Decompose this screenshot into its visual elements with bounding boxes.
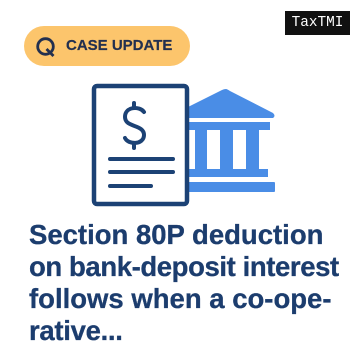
title: on bank-deposit interest: [29, 251, 339, 282]
dollar sign: [125, 103, 144, 148]
icon: document: [94, 86, 187, 204]
badge label: CASE UPDATE: [66, 36, 172, 54]
logo: TaxTMI: TaxTMI: [292, 15, 343, 31]
icon: bank: [180, 89, 275, 192]
title: follows when a co-ope-: [29, 283, 332, 314]
title: rative...: [29, 315, 123, 346]
title: Section 80P deduction: [29, 219, 323, 250]
text lines: [110, 159, 173, 186]
badge: case update: [24, 26, 190, 66]
logo: TaxTMI: [285, 11, 350, 35]
icon: Q search mark: [36, 37, 55, 57]
illustration: document and bank: [92, 84, 275, 206]
